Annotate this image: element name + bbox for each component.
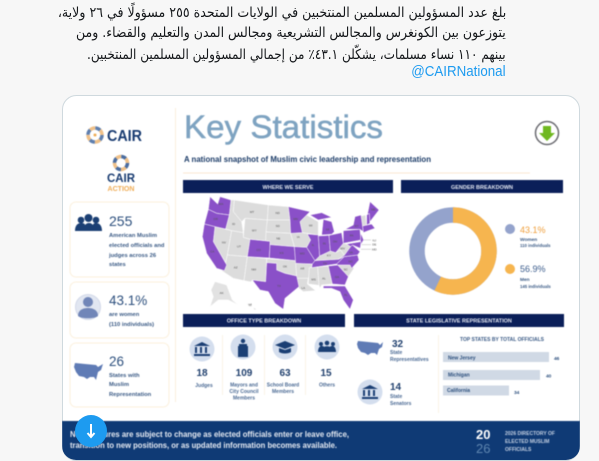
bar chart: top states: New Jersey	[448, 356, 476, 362]
bar chart: top states: TOP STATES BY TOTAL OFFICIALS	[460, 337, 545, 343]
footer band	[62, 421, 580, 461]
stat: state representatives: 32	[392, 339, 404, 350]
map of US states: AL	[322, 276, 326, 280]
map of US states: WA	[219, 202, 223, 206]
heading: gender breakdown: GENDER BREAKDOWN	[451, 185, 513, 191]
map of US states: OR	[213, 217, 219, 221]
stat: judges	[190, 336, 214, 389]
stat: mayors: City Council	[229, 389, 259, 395]
heading: office type	[183, 314, 345, 327]
tweet line 3: بينهم ١١٠ نساء مسلمات، يشكّلن ٤٣.١٪ من إجمالي المسؤولين المسلمين المنتخبين.	[87, 47, 506, 63]
map of US states: NY	[355, 224, 359, 228]
map of US states: GA	[335, 275, 339, 279]
stat: others: Others	[319, 382, 335, 388]
map of US states: LA	[301, 286, 305, 290]
stat: mayors	[229, 334, 259, 402]
stat card: 43.1% women: (110 individuals)	[109, 322, 154, 328]
bar chart: top states	[443, 337, 560, 396]
tweet handle: @CAIRNational	[412, 64, 506, 80]
map of US states: CA	[210, 250, 214, 254]
map of US states: IA	[297, 235, 300, 239]
footer directory title: OFFICIALS	[505, 447, 532, 453]
panel: gender breakdown	[401, 180, 563, 289]
map of US states	[202, 197, 379, 310]
panel: office type breakdown	[183, 314, 345, 402]
stat card: 255 officials: 255	[109, 213, 133, 229]
stat: state representatives: Representatives	[390, 357, 429, 363]
map of US states: ID	[232, 222, 236, 226]
footer note: Note: Figures are subject to change as elected officials enter or leave office,	[70, 429, 349, 439]
map of US states: CO	[256, 248, 262, 252]
donut chart	[417, 215, 489, 287]
stat: mayors: Mayors and	[230, 382, 258, 388]
map of US states: KY	[327, 253, 331, 257]
map of US states: TX	[277, 284, 281, 288]
icon: woman avatar	[76, 294, 100, 320]
logo: CAIR: CAIR	[107, 128, 142, 145]
heading: gender breakdown	[401, 180, 563, 193]
footer directory title: 2026 DIRECTORY OF	[505, 431, 555, 437]
map of US states: TN	[323, 262, 327, 266]
heading: state legislative	[354, 314, 564, 327]
map of US states: MO	[300, 252, 305, 256]
map of US states: WI	[309, 224, 313, 228]
map of US states: FL	[344, 293, 348, 297]
stat card: 43.1% women: 43.1%	[109, 293, 147, 308]
footer note: transition to new positions, or as updated information becomes available.	[70, 440, 337, 450]
footer year	[476, 427, 490, 456]
icon: US map	[74, 363, 103, 380]
stat: school boards	[267, 334, 299, 395]
stat card: 255 officials: judges across 26	[108, 253, 157, 259]
heading: where we serve	[183, 180, 393, 193]
logo: CAIR	[88, 128, 142, 145]
stat: others: 15	[320, 368, 332, 379]
map of US states: OH	[333, 240, 337, 244]
stat card: 255 officials	[70, 202, 169, 277]
stat: school boards: School Board	[267, 382, 299, 388]
icon: green download arrow	[536, 122, 558, 144]
map of US states: MN	[293, 217, 298, 221]
map of US states: IL	[312, 243, 315, 247]
heading: state legislative: STATE LEGISLATIVE REPRESENTATION	[406, 318, 512, 324]
stat card: 26 states	[70, 343, 169, 407]
legend: men	[505, 264, 551, 289]
stat card: 43.1% women	[70, 282, 169, 338]
stat card: 26 states: Representation	[109, 392, 152, 398]
stat: state representatives: State	[390, 350, 402, 356]
footer directory title	[505, 431, 555, 453]
panel: where we serve	[183, 180, 393, 310]
legend: men: Men	[520, 277, 530, 283]
map of US states: UT	[237, 244, 241, 248]
map of US states: VA	[349, 250, 353, 254]
legend: women: Women	[520, 237, 537, 243]
title: Key Statistics	[184, 109, 383, 145]
map of US states: KS	[280, 251, 284, 255]
bar chart: top states: 40	[546, 374, 552, 380]
panel: state legislative representation	[354, 314, 564, 413]
stat: mayors: Members	[233, 396, 255, 402]
footer directory title: ELECTED MUSLIM	[505, 439, 549, 445]
stat card: 26 states: 26	[109, 354, 124, 369]
legend: men: 56.9%	[520, 264, 546, 274]
legend: women	[505, 224, 551, 248]
map of US states: OK	[283, 265, 287, 269]
map of US states: SC	[344, 268, 349, 272]
map of US states: NV	[222, 241, 226, 245]
stat: judges: Judges	[195, 383, 213, 389]
map of US states: DE	[372, 243, 376, 247]
map of US states: PA	[350, 234, 354, 238]
heading: office type: OFFICE TYPE BREAKDOWN	[227, 318, 301, 324]
stat card: 255 officials: elected officials and	[109, 243, 165, 249]
bar chart: top states: California	[447, 388, 470, 394]
footer year: 20	[476, 427, 490, 442]
map of US states: ME	[371, 208, 376, 212]
logo: CAIR Action: ACTION	[108, 184, 134, 193]
map of US states: HI	[249, 302, 252, 306]
stat: state senators	[358, 380, 412, 407]
map of US states: MI	[326, 228, 329, 232]
stat card: 43.1% women: are women	[109, 312, 140, 318]
map of US states: ND	[276, 211, 281, 215]
stat card: 26 states: States with	[109, 373, 140, 379]
stat: state representatives	[357, 339, 429, 363]
stat: mayors: 109	[236, 368, 253, 379]
stat: others	[314, 334, 340, 388]
map of US states: SD	[276, 224, 281, 228]
stat card: 26 states: Muslim	[109, 382, 129, 388]
stat card: 255 officials: states	[109, 262, 126, 268]
heading: where we serve: WHERE WE SERVE	[263, 185, 314, 191]
map of US states: IN	[323, 241, 326, 245]
footer year: 26	[476, 441, 490, 456]
map of US states: WV	[340, 246, 345, 250]
stat: state senators: State	[390, 394, 402, 400]
map of US states: NC	[348, 259, 354, 263]
infographic card	[62, 95, 580, 461]
subtitle: A national snapshot of Muslim civic leadership and representation	[184, 154, 431, 164]
map of US states: AR	[300, 266, 305, 270]
stat: school boards: Members	[272, 389, 294, 395]
map of US states: AZ	[234, 265, 238, 269]
bar chart: top states: 46	[554, 356, 560, 362]
map of US states: NJ	[372, 238, 377, 242]
map of US states: WY	[252, 229, 257, 233]
stat: state senators: 14	[390, 382, 402, 393]
scroll-down button	[75, 415, 107, 447]
stat: school boards: 63	[279, 368, 291, 379]
legend: men: 145 individuals	[520, 284, 551, 289]
map of US states: NE	[276, 237, 280, 241]
logo: CAIR Action: CAIR	[107, 171, 135, 185]
tweet line 2: يتوزعون بين الكونغرس والمجالس التشريعية ومجالس المدن والتعليم والقضاء. ومن	[76, 25, 506, 41]
map of US states: MS	[311, 277, 316, 281]
tweet text	[58, 2, 506, 80]
bar chart: top states: Michigan	[448, 372, 470, 378]
footer note	[70, 429, 349, 450]
icon: people	[75, 214, 102, 231]
logo: CAIR Action	[107, 156, 135, 193]
stat: state senators: Senators	[390, 401, 412, 407]
map of US states: AK	[220, 291, 224, 295]
legend: women: 43.1%	[520, 225, 546, 235]
stat: judges: 18	[196, 368, 208, 379]
map of US states: MD	[372, 247, 377, 251]
bar chart: top states: 34	[514, 390, 520, 396]
stat card: 255 officials: American Muslim	[109, 233, 157, 239]
legend: women: 110 individuals	[520, 243, 551, 248]
map of US states: MT	[250, 210, 254, 214]
map of US states: NM	[251, 268, 256, 272]
tweet line 1: بلغ عدد المسؤولين المسلمين المنتخبين في الولايات المتحدة ٢٥٥ مسؤولًا في ٢٦ ولاية،	[58, 5, 506, 21]
